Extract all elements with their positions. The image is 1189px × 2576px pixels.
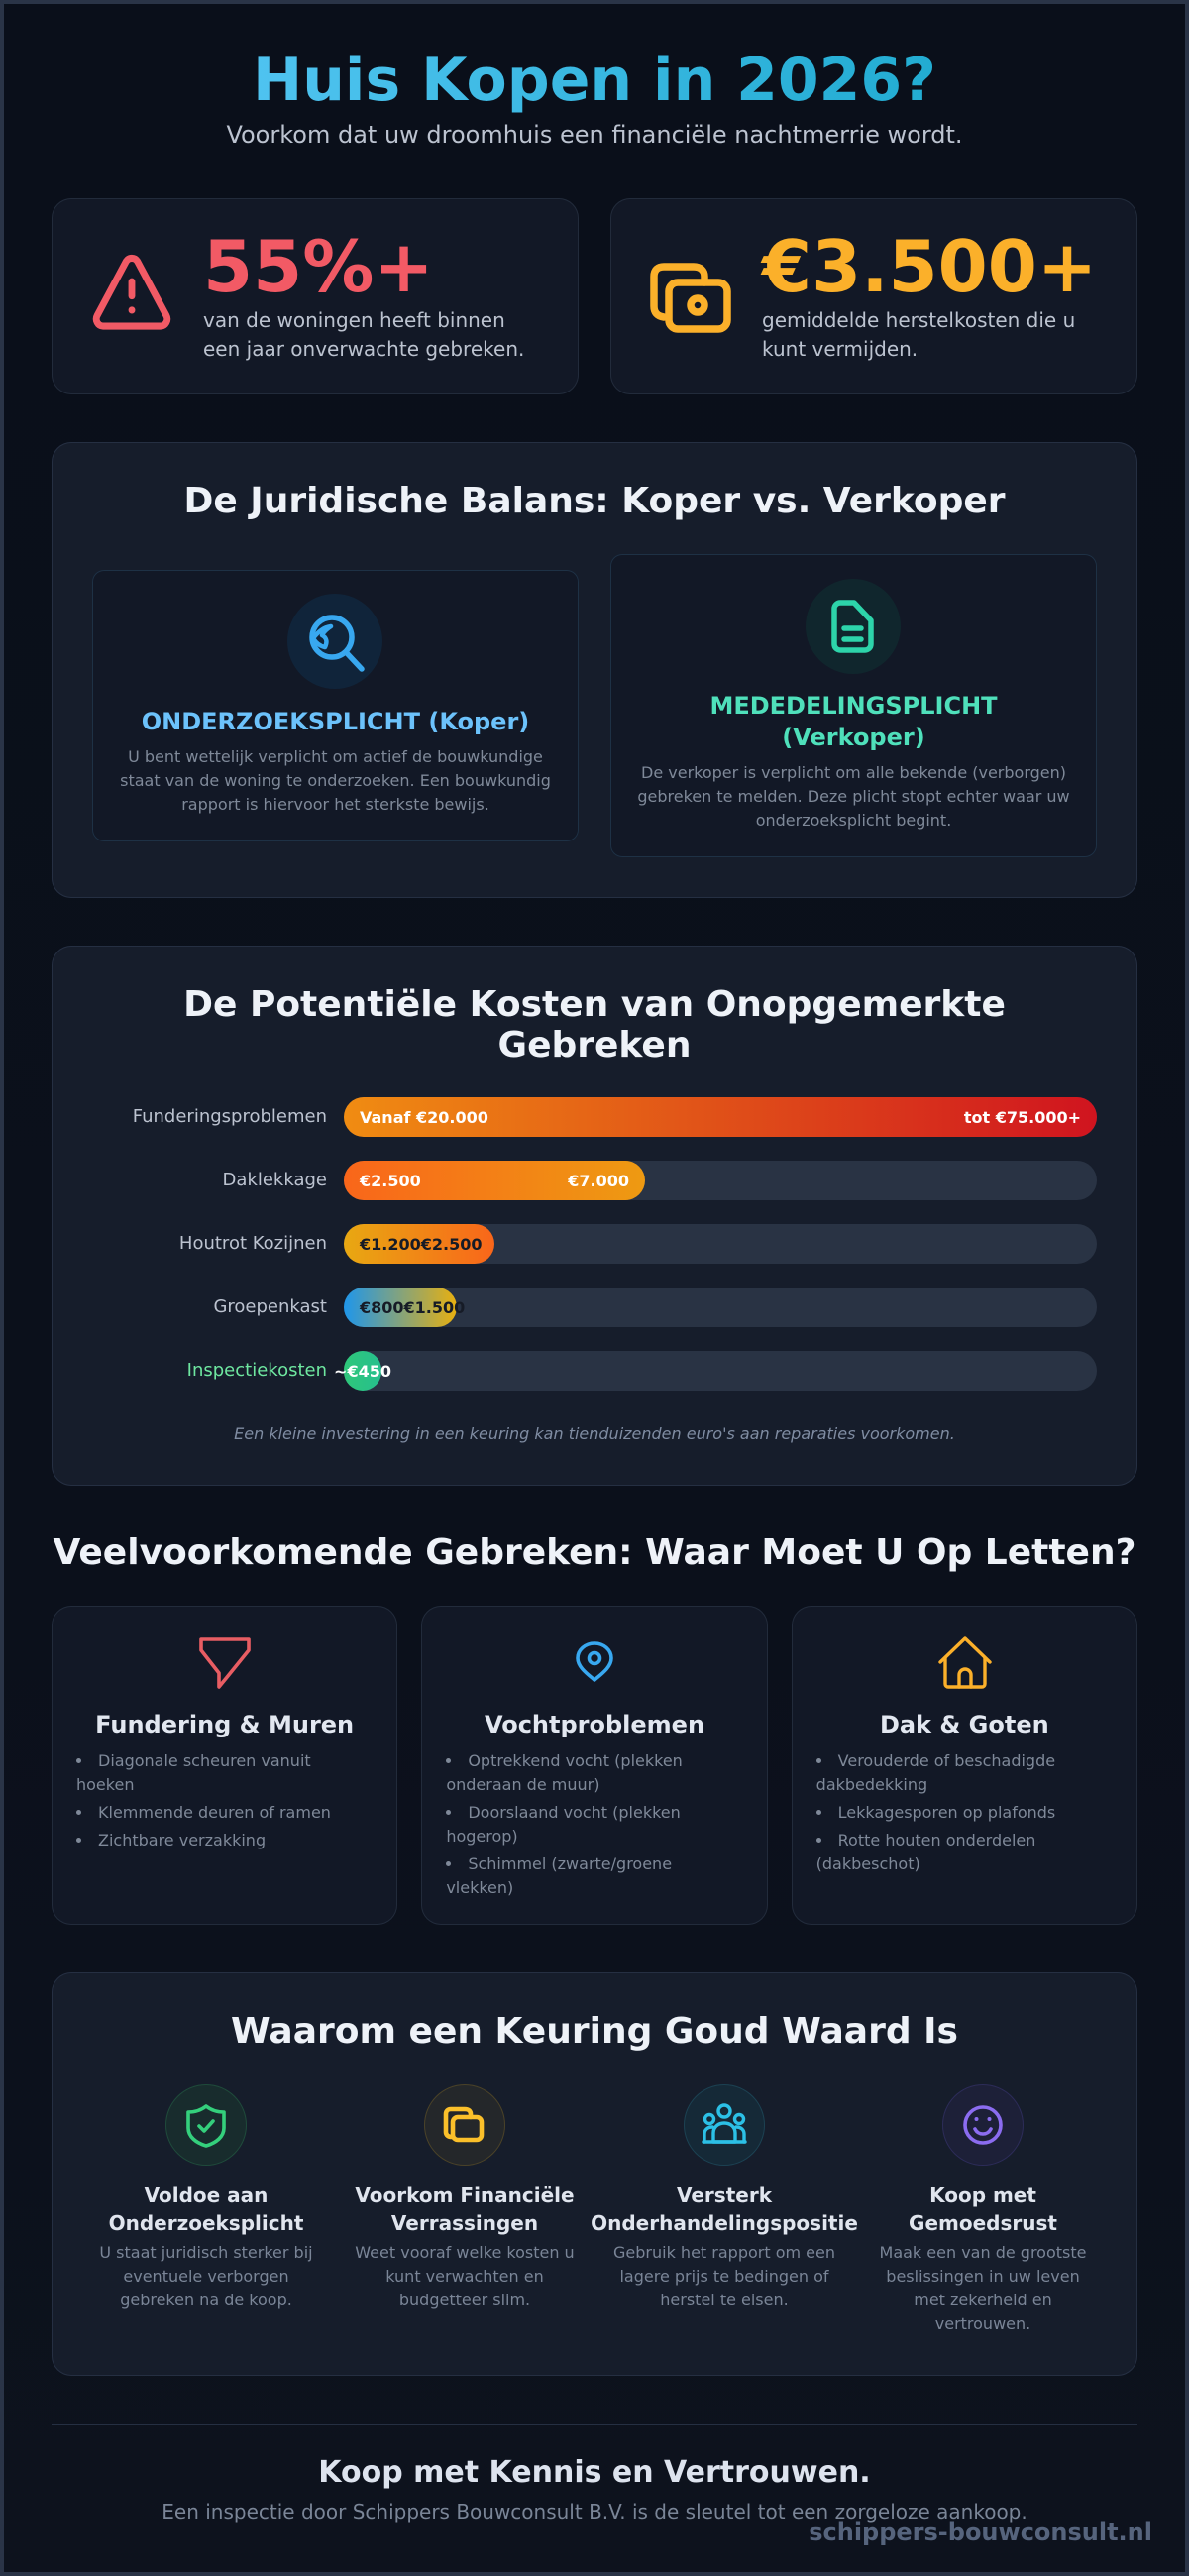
benefit text: gebreken na de koop. bbox=[120, 2291, 292, 2309]
bar: daklekkage: €7.000 bbox=[568, 1172, 629, 1189]
benefit title: Verrassingen bbox=[391, 2211, 538, 2235]
card text bbox=[120, 747, 551, 814]
card: mededelingsplicht bbox=[610, 554, 1097, 857]
card text bbox=[637, 763, 1070, 830]
icon: funnel bbox=[199, 1637, 251, 1689]
defect list: Optrekkend vocht (plekken onderaan de muur) bbox=[446, 1751, 683, 1794]
title: Huis Kopen in 2026? bbox=[253, 46, 936, 115]
icon: shield bbox=[165, 2084, 247, 2166]
bar: houtrot: €1.200 bbox=[360, 1235, 421, 1253]
benefit: financieel bbox=[355, 2084, 575, 2309]
benefit: onderhandelen bbox=[591, 2084, 858, 2309]
benefit text: Weet vooraf welke kosten u bbox=[355, 2243, 575, 2262]
benefit text: budgetteer slim. bbox=[399, 2291, 530, 2309]
bar: inspectie bbox=[344, 1351, 1097, 1391]
heading: Waarom een Keuring Goud Waard Is bbox=[231, 2011, 958, 2052]
card text: gebreken te melden. Deze plicht stopt echter waar uw bbox=[637, 787, 1070, 806]
panel: stat cost bbox=[610, 198, 1137, 394]
icon: pin bbox=[576, 1641, 613, 1682]
heading: De Potentiële Kosten van Onopgemerkte bbox=[183, 984, 1006, 1025]
card: vocht bbox=[421, 1606, 768, 1925]
bar: fundering: Vanaf €20.000 bbox=[360, 1108, 488, 1126]
subtitle: Voorkom dat uw droomhuis een financiële nachtmerrie wordt. bbox=[226, 121, 963, 149]
benefit text: eventuele verborgen bbox=[123, 2267, 289, 2286]
benefit text: Gebruik het rapport om een bbox=[613, 2243, 835, 2262]
defect list: Rotte houten onderdelen (dakbeschot) bbox=[816, 1831, 1035, 1873]
stat number: 55%+ bbox=[203, 225, 434, 308]
defect list bbox=[816, 1751, 1055, 1873]
defect list bbox=[76, 1751, 331, 1849]
icon: house bbox=[938, 1636, 992, 1689]
card heading bbox=[709, 692, 998, 751]
benefit title: Versterk bbox=[677, 2184, 772, 2207]
stat text: een jaar onverwachte gebreken. bbox=[203, 337, 524, 361]
chart caption: Een kleine investering in een keuring kan tienduizenden euro's aan reparaties voorkomen. bbox=[234, 1424, 955, 1443]
bar: fundering: tot €75.000+ bbox=[964, 1108, 1081, 1126]
benefit title: Koop met bbox=[929, 2184, 1036, 2207]
stat text: kunt vermijden. bbox=[762, 337, 918, 361]
benefit title: Voorkom Financiële bbox=[355, 2184, 575, 2207]
card text: rapport is hiervoor het sterkste bewijs. bbox=[181, 795, 489, 814]
bar label: Daklekkage bbox=[223, 1170, 327, 1190]
benefit title bbox=[355, 2184, 575, 2235]
defect list: Schimmel (zwarte/groene vlekken) bbox=[446, 1854, 672, 1897]
benefit text: kunt verwachten en bbox=[385, 2267, 544, 2286]
benefit text: met zekerheid en bbox=[914, 2291, 1052, 2309]
card heading: ONDERZOEKSPLICHT (Koper) bbox=[142, 708, 529, 735]
icon: warning triangle bbox=[93, 254, 170, 330]
icon: banknotes bbox=[650, 263, 731, 333]
benefit text: Maak een van de grootste bbox=[880, 2243, 1086, 2262]
footer heading: Koop met Kennis en Vertrouwen. bbox=[318, 2455, 871, 2490]
icon: people bbox=[684, 2084, 765, 2166]
defect list: Zichtbare verzakking bbox=[98, 1831, 266, 1849]
card: dak bbox=[792, 1606, 1137, 1925]
heading: De Juridische Balans: Koper vs. Verkoper bbox=[183, 481, 1006, 521]
bar: houtrot bbox=[344, 1224, 1097, 1264]
defect list: Diagonale scheuren vanuit hoeken bbox=[76, 1751, 311, 1794]
benefit title bbox=[109, 2184, 303, 2235]
benefit text: beslissingen in uw leven bbox=[886, 2267, 1080, 2286]
stat text bbox=[203, 308, 524, 361]
benefit title bbox=[909, 2184, 1057, 2235]
icon: banknotes bbox=[424, 2084, 505, 2166]
card text: De verkoper is verplicht om alle bekende (verborgen) bbox=[641, 763, 1066, 782]
bar: fundering bbox=[344, 1097, 1097, 1137]
benefit text bbox=[613, 2243, 835, 2309]
card heading: (Verkoper) bbox=[782, 724, 925, 751]
heading: Gebreken bbox=[498, 1025, 691, 1065]
defect list: Klemmende deuren of ramen bbox=[98, 1803, 331, 1822]
benefit text: U staat juridisch sterker bij bbox=[99, 2243, 313, 2262]
card heading: Dak & Goten bbox=[880, 1711, 1049, 1738]
benefit text bbox=[880, 2243, 1086, 2333]
benefit title: Onderhandelingspositie bbox=[591, 2211, 858, 2235]
benefit: gemoedsrust bbox=[880, 2084, 1086, 2333]
benefit title: Gemoedsrust bbox=[909, 2211, 1057, 2235]
bar: groepenkast: €800 bbox=[360, 1298, 404, 1316]
panel: stat 55% bbox=[52, 198, 579, 394]
bar: houtrot: €2.500 bbox=[421, 1235, 482, 1253]
bar label: Groepenkast bbox=[213, 1296, 327, 1317]
bar: groepenkast: €1.500 bbox=[404, 1298, 465, 1316]
bar: inspectie: ~€450 bbox=[334, 1362, 391, 1380]
defect list: Doorslaand vocht (plekken hogerop) bbox=[446, 1803, 681, 1846]
panel: potentiële kosten bbox=[52, 946, 1137, 1486]
bar label: Funderingsproblemen bbox=[133, 1106, 327, 1127]
benefit text: vertrouwen. bbox=[935, 2314, 1030, 2333]
stat text: van de woningen heeft binnen bbox=[203, 308, 505, 332]
card heading: Fundering & Muren bbox=[95, 1711, 354, 1738]
card heading: Vochtproblemen bbox=[485, 1711, 704, 1738]
benefit text: lagere prijs te bedingen of bbox=[619, 2267, 829, 2286]
stat text: gemiddelde herstelkosten die u bbox=[762, 308, 1075, 332]
card: fundering bbox=[52, 1606, 397, 1925]
defect list: Verouderde of beschadigde dakbedekking bbox=[816, 1751, 1055, 1794]
panel: juridische balans bbox=[52, 442, 1137, 898]
bar: daklekkage bbox=[344, 1161, 1097, 1200]
icon: document bbox=[806, 579, 901, 674]
card heading: MEDEDELINGSPLICHT bbox=[709, 692, 998, 720]
card text: onderzoeksplicht begint. bbox=[756, 811, 951, 830]
icon: magnifier bbox=[287, 594, 382, 689]
defect list: Lekkagesporen op plafonds bbox=[838, 1803, 1055, 1822]
bar label: Houtrot Kozijnen bbox=[179, 1233, 327, 1254]
bar: groepenkast bbox=[344, 1288, 1097, 1327]
footer text: Een inspectie door Schippers Bouwconsult B.V. is de sleutel tot een zorgeloze aankoop. bbox=[162, 2500, 1027, 2523]
card: onderzoeksplicht bbox=[92, 570, 579, 841]
benefit text: herstel te eisen. bbox=[660, 2291, 789, 2309]
benefit text bbox=[355, 2243, 575, 2309]
benefit title bbox=[591, 2184, 858, 2235]
card text: U bent wettelijk verplicht om actief de bouwkundige bbox=[128, 747, 543, 766]
heading bbox=[183, 984, 1006, 1065]
benefit text bbox=[99, 2243, 313, 2309]
benefit title: Onderzoeksplicht bbox=[109, 2211, 303, 2235]
stat text bbox=[762, 308, 1075, 361]
bar chart: repair costs bbox=[133, 1097, 1097, 1391]
benefit: onderzoeksplicht bbox=[99, 2084, 313, 2309]
benefit title: Voldoe aan bbox=[145, 2184, 268, 2207]
defect list bbox=[446, 1751, 683, 1897]
bar label: Inspectiekosten bbox=[187, 1360, 327, 1381]
card text: staat van de woning te onderzoeken. Een bouwkundig bbox=[120, 771, 551, 790]
icon: smile bbox=[942, 2084, 1024, 2166]
stat number: €3.500+ bbox=[762, 225, 1097, 308]
bar: daklekkage: €2.500 bbox=[360, 1172, 421, 1189]
watermark: schippers-bouwconsult.nl bbox=[809, 2519, 1152, 2546]
section heading: gebreken: Veelvoorkomende Gebreken: Waar Moet U Op Letten? bbox=[54, 1532, 1135, 1573]
panel: waarom keuring bbox=[52, 1972, 1137, 2376]
